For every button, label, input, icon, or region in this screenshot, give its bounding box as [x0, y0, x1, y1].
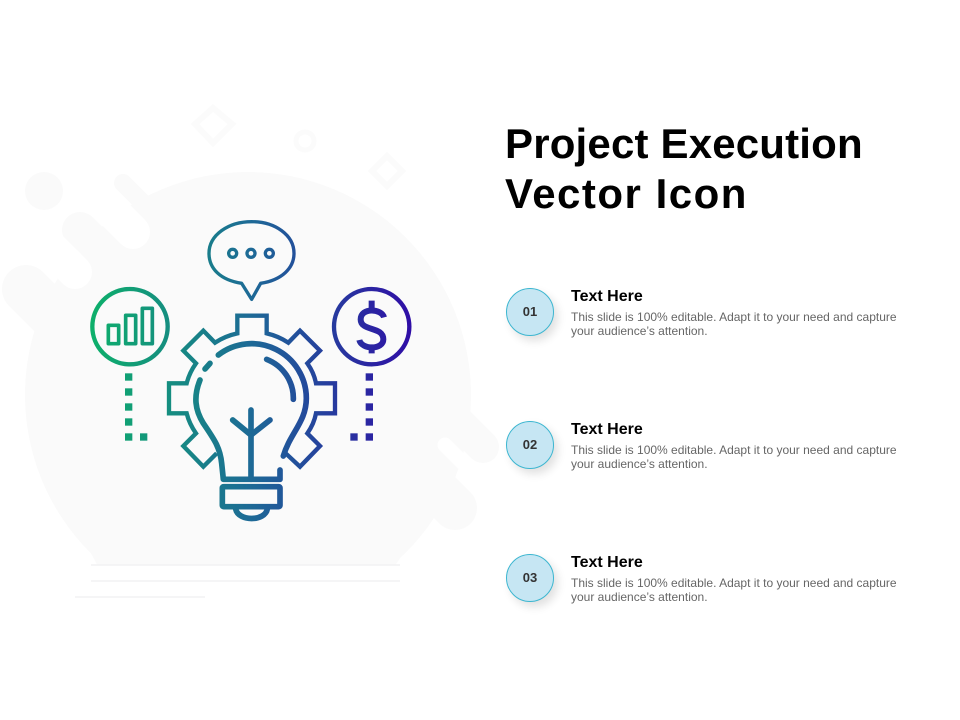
title	[505, 120, 863, 217]
icon: dollar in circle	[334, 289, 409, 364]
badge 03	[506, 554, 554, 602]
heading 01: Text Here	[571, 288, 643, 305]
description 01: This slide is 100% editable. Adapt it to your need and capture	[571, 310, 897, 324]
item 03	[506, 554, 897, 609]
description 02: This slide is 100% editable. Adapt it to your need and capture	[571, 443, 897, 457]
badge 02	[506, 421, 554, 469]
icon: gear outline	[169, 316, 335, 467]
right dotted connector	[350, 373, 373, 441]
description 03: This slide is 100% editable. Adapt it to your need and capture	[571, 576, 897, 590]
icon: speech bubble	[209, 222, 294, 299]
badge 02: 02	[523, 437, 537, 452]
title: Vector Icon	[505, 170, 748, 217]
left dotted connector	[125, 373, 147, 441]
description 01	[571, 310, 897, 338]
heading 03: Text Here	[571, 554, 643, 571]
badge 01: 01	[523, 304, 537, 319]
description 03: your audience’s attention.	[571, 590, 708, 604]
badge 03: 03	[523, 570, 537, 585]
item 01	[506, 288, 897, 343]
badge 01	[506, 288, 554, 336]
item 02	[506, 421, 897, 476]
description 03	[571, 576, 897, 604]
background decoration	[75, 564, 400, 598]
description 02: your audience’s attention.	[571, 457, 708, 471]
title: Project Execution	[505, 120, 863, 167]
description 01: your audience’s attention.	[571, 324, 708, 338]
icon: lightbulb	[196, 344, 306, 518]
heading 02: Text Here	[571, 421, 643, 438]
icon: bar chart in circle	[92, 289, 168, 364]
description 02	[571, 443, 897, 471]
